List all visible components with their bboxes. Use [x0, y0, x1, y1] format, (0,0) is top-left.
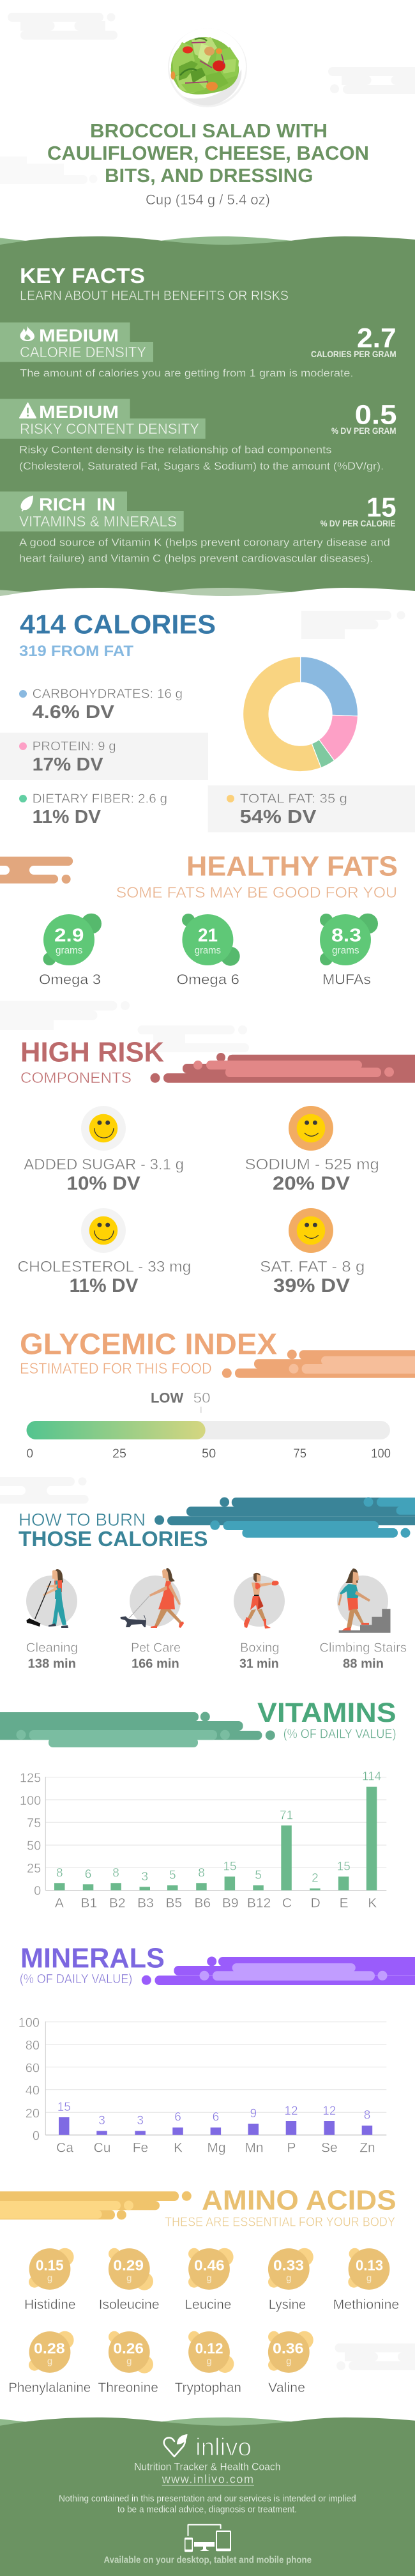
tagline: Nutrition Tracker & Health Coach: [134, 2461, 281, 2473]
y axis: [19, 2016, 40, 2143]
unit: % DV PER CALORIE: [321, 518, 395, 528]
gauge scale: 100: [371, 1447, 391, 1461]
figure: boxer: [244, 1573, 279, 1629]
stat: omega 3: [39, 914, 102, 988]
legend: protein: [19, 740, 116, 775]
y axis: 50: [27, 1839, 41, 1853]
x axis labels: B3: [137, 1896, 154, 1911]
stat: omega 3: grams: [56, 946, 83, 956]
key facts heading: KEY FACTS: [20, 264, 145, 288]
decorative cloud: [335, 2343, 415, 2370]
amino: threonine: [98, 2331, 158, 2395]
activity: cleaning: [26, 1569, 78, 1671]
amino: tryptophan: 0.12: [195, 2340, 223, 2356]
amino: tryptophan: [175, 2331, 241, 2395]
description: Risky Content density is the relationship of bad components: [19, 444, 332, 456]
activity: boxing: 31 min: [239, 1657, 279, 1671]
heading: HEALTHY FATS: [186, 851, 398, 882]
y axis: 40: [26, 2084, 40, 2098]
activity: pet care: 166 min: [132, 1657, 179, 1671]
value labels: 6: [174, 2111, 181, 2124]
decorative graphic: [0, 1712, 275, 1747]
amino: histidine: g: [47, 2273, 52, 2284]
heading line 1: HOW TO BURN: [19, 1510, 146, 1529]
description: The amount of calories you are getting from 1 gram is moderate.: [20, 368, 354, 379]
amino: valine: [268, 2331, 313, 2395]
subheading: SOME FATS MAY BE GOOD FOR YOU: [116, 884, 397, 901]
heading line 2: THOSE CALORIES: [19, 1528, 208, 1551]
value labels: 8: [112, 1866, 119, 1880]
legend: dietary fiber: [19, 792, 167, 827]
gauge scale: [27, 1447, 391, 1461]
header background clouds: [0, 13, 415, 184]
x axis labels: E: [340, 1896, 349, 1911]
amino: threonine: Threonine: [98, 2380, 158, 2395]
x axis labels: B9: [222, 1896, 239, 1911]
panel: minerals: [19, 1942, 415, 2156]
rating label: RISKY CONTENT DENSITY: [20, 420, 199, 437]
legend: protein: 17% DV: [33, 755, 103, 775]
gauge bar: [27, 1421, 390, 1439]
unit: % DV PER GRAM: [331, 425, 396, 436]
logo icon: [164, 2434, 188, 2457]
amino: methionine: 0.13: [356, 2257, 383, 2273]
legend: carbohydrates: [19, 687, 183, 723]
amino: lysine: [268, 2248, 313, 2312]
x axis labels: [55, 1896, 377, 1911]
y axis: 20: [26, 2106, 40, 2120]
description: [19, 444, 384, 472]
value labels: [57, 2101, 370, 2128]
amino: phenylalanine: [8, 2331, 91, 2395]
legend: dietary fiber: DIETARY FIBER: 2.6 g: [33, 792, 167, 806]
activity: climbing stairs: Climbing Stairs: [319, 1641, 407, 1655]
amino: leucine: [185, 2248, 234, 2312]
y axis: 80: [26, 2039, 40, 2053]
calories heading: 414 CALORIES: [20, 610, 216, 640]
panel: footer: [0, 2418, 415, 2576]
value labels: 8: [198, 1866, 205, 1880]
y axis: 75: [27, 1816, 41, 1830]
amino: threonine: 0.26: [113, 2340, 144, 2356]
amino: valine: Valine: [268, 2380, 305, 2395]
legend backgrounds: [0, 733, 415, 832]
title: CAULIFLOWER, CHEESE, BACON: [47, 142, 369, 164]
value labels: 15: [57, 2101, 71, 2114]
activity: boxing: [234, 1573, 285, 1671]
item: saturated fat: SAT. FAT - 8 g: [260, 1259, 365, 1276]
description: (Cholesterol, Saturated Fat, Sugars & Sodium) to the amount (%DV/gr).: [19, 461, 384, 472]
rating: MEDIUM: [39, 402, 119, 422]
panel: key facts: [0, 236, 415, 604]
amino: lysine: Lysine: [269, 2297, 306, 2312]
amino: leucine: Leucine: [185, 2297, 231, 2312]
x axis labels: K: [368, 1896, 377, 1911]
stat: omega 3: 2.9: [54, 925, 84, 946]
x axis labels: Mg: [207, 2141, 226, 2156]
activity: climbing stairs: 88 min: [343, 1657, 384, 1671]
icon: leaf: [20, 496, 33, 511]
value labels: 6: [213, 2111, 219, 2124]
panel: glycemic index: [20, 1327, 415, 1461]
subheading: (% OF DAILY VALUE): [20, 1972, 132, 1986]
amino: isoleucine: g: [126, 2273, 132, 2284]
decorative graphic: [142, 1956, 415, 1985]
amino: leucine: g: [206, 2273, 212, 2284]
item: added sugar: 10% DV: [66, 1173, 140, 1194]
activity: cleaning: 138 min: [28, 1657, 76, 1671]
amino: histidine: [24, 2248, 76, 2312]
icon: devices: [185, 2524, 231, 2552]
rating: MEDIUM: [39, 325, 119, 345]
panel: healthy fats: [0, 851, 398, 988]
website: www.inlivo.com: [162, 2473, 253, 2486]
panel: amino acids: [0, 2184, 415, 2395]
item: saturated fat: 39% DV: [273, 1275, 350, 1296]
amino: lysine: g: [286, 2273, 291, 2284]
value labels: 3: [137, 2114, 144, 2128]
item: sodium: 20% DV: [273, 1173, 350, 1194]
amino: threonine: g: [126, 2356, 132, 2367]
x axis labels: P: [287, 2141, 296, 2156]
panel: vitamins: [0, 1698, 396, 1911]
subheading: ESTIMATED FOR THIS FOOD: [20, 1360, 212, 1377]
title: BROCCOLI SALAD WITH: [90, 119, 328, 142]
heading: HIGH RISK: [20, 1037, 164, 1068]
rating label: VITAMINS & MINERALS: [19, 513, 177, 530]
x axis labels: Mn: [245, 2141, 264, 2156]
icon: warning: [20, 403, 36, 418]
item: cholesterol: [17, 1208, 191, 1296]
item: added sugar: ADDED SUGAR - 3.1 g: [24, 1156, 184, 1174]
activity: pet care: [121, 1568, 184, 1671]
unit: CALORIES PER GRAM: [311, 349, 396, 359]
panel: how to burn: [19, 1498, 415, 1671]
activity: climbing stairs: [319, 1568, 407, 1671]
value labels: 8: [364, 2109, 370, 2122]
legend: carbohydrates: CARBOHYDRATES: 16 g: [33, 687, 183, 702]
amino: valine: g: [286, 2356, 291, 2367]
value labels: 114: [362, 1770, 382, 1784]
bars: [59, 2117, 372, 2135]
bar chart: vitamins: [20, 1770, 386, 1911]
value labels: 3: [142, 1870, 148, 1883]
calories from fat: 319 FROM FAT: [19, 643, 133, 660]
amino: methionine: Methionine: [333, 2297, 399, 2312]
donut chart: [243, 657, 358, 772]
y axis: 60: [26, 2061, 40, 2075]
salad bowl image: [168, 28, 247, 107]
x axis labels: C: [282, 1896, 292, 1911]
fact: risky content density: [0, 399, 397, 472]
item: sodium: SODIUM - 525 mg: [245, 1156, 379, 1174]
bar chart: minerals: [19, 2016, 386, 2156]
subheading: (% OF DAILY VALUE): [283, 1728, 396, 1742]
decorative graphic: [222, 1349, 415, 1378]
stat: omega 3: Omega 3: [39, 972, 101, 988]
item: cholesterol: CHOLESTEROL - 33 mg: [17, 1259, 191, 1276]
gauge scale: 25: [112, 1447, 126, 1461]
amino: tryptophan: g: [206, 2356, 212, 2367]
decorative cloud: [0, 1477, 89, 1504]
gauge label: 50: [193, 1390, 211, 1406]
fact: calorie density: [0, 323, 396, 379]
item: sodium: [245, 1106, 379, 1194]
value labels: 3: [98, 2114, 105, 2128]
disclaimer: [59, 2494, 356, 2515]
value labels: 9: [250, 2107, 257, 2120]
availability note: Available on your desktop, tablet and mobile phone: [103, 2556, 312, 2566]
y axis: 125: [20, 1771, 41, 1785]
logo wordmark: inlivo: [195, 2434, 252, 2461]
amino: histidine: Histidine: [24, 2297, 76, 2312]
x axis labels: B5: [166, 1896, 182, 1911]
y axis: 0: [34, 1884, 41, 1898]
x axis labels: B6: [194, 1896, 211, 1911]
activity: boxing: Boxing: [240, 1641, 279, 1655]
subheading: THESE ARE ESSENTIAL FOR YOUR BODY: [165, 2215, 395, 2229]
amino: isoleucine: 0.29: [113, 2257, 144, 2273]
figure: woman walking dog: [121, 1568, 184, 1628]
panel: calories: [0, 610, 415, 832]
heading: GLYCEMIC INDEX: [20, 1327, 277, 1360]
disclaimer: to be a medical advice, diagnosis or treatment.: [117, 2505, 297, 2515]
amino: phenylalanine: Phenylalanine: [8, 2380, 91, 2395]
y axis: 25: [27, 1862, 41, 1876]
bars: [54, 1787, 377, 1890]
stat: omega 6: Omega 6: [176, 972, 239, 988]
x axis labels: D: [311, 1896, 321, 1911]
legend: total fat: TOTAL FAT: 35 g: [240, 792, 347, 806]
amino: phenylalanine: 0.28: [34, 2340, 65, 2356]
description: heart failure) and Vitamin C (helps prevent cardiovascular diseases).: [19, 553, 374, 565]
gauge scale: 50: [202, 1447, 216, 1461]
stat: mufas: MUFAs: [322, 972, 371, 988]
activity: pet care: Pet Care: [131, 1641, 181, 1655]
x axis labels: A: [55, 1896, 64, 1911]
legend: total fat: [227, 792, 347, 827]
item: cholesterol: 11% DV: [70, 1275, 139, 1296]
y axis: [20, 1771, 41, 1898]
amino: isoleucine: [99, 2248, 160, 2312]
x axis labels: [56, 2141, 375, 2156]
y axis: 100: [20, 1794, 41, 1808]
legend: protein: PROTEIN: 9 g: [33, 740, 116, 754]
stat: mufas: 8.3: [331, 925, 361, 946]
stat: omega 6: [176, 914, 240, 988]
stat: omega 6: grams: [195, 946, 221, 956]
value: 2.7: [357, 323, 396, 354]
stat: omega 6: 21: [198, 925, 218, 946]
decorative graphic: [151, 1053, 415, 1083]
description: A good source of Vitamin K (helps prevent coronary artery disease and: [19, 537, 390, 548]
legend: dietary fiber: 11% DV: [33, 807, 101, 827]
gauge tick: [200, 1407, 202, 1413]
y axis: 0: [33, 2129, 40, 2143]
heading: AMINO ACIDS: [202, 2184, 396, 2216]
x axis labels: B2: [109, 1896, 126, 1911]
figure: woman sweeping: [27, 1569, 68, 1628]
x axis labels: B1: [80, 1896, 97, 1911]
value labels: 15: [337, 1860, 351, 1874]
stat: mufas: grams: [332, 946, 359, 956]
x axis labels: B12: [247, 1896, 271, 1911]
amino: methionine: g: [366, 2273, 372, 2284]
gauge label: [151, 1390, 211, 1406]
value labels: [56, 1770, 382, 1885]
figure: woman climbing stairs: [338, 1568, 391, 1633]
amino: histidine: 0.15: [36, 2257, 64, 2273]
item: saturated fat: [260, 1208, 365, 1296]
amino: isoleucine: Isoleucine: [99, 2297, 160, 2312]
title: BITS, AND DRESSING: [105, 164, 313, 187]
description: [19, 537, 390, 565]
x axis labels: Se: [321, 2141, 338, 2156]
amino: phenylalanine: g: [47, 2356, 52, 2367]
x axis labels: Ca: [56, 2141, 73, 2156]
key facts subheading: LEARN ABOUT HEALTH BENEFITS OR RISKS: [20, 288, 289, 303]
panel: high risk: [17, 1037, 415, 1296]
title: [47, 119, 369, 187]
value labels: 15: [223, 1860, 236, 1874]
value labels: 5: [255, 1869, 262, 1882]
x axis labels: Zn: [359, 2141, 375, 2156]
value: 15: [366, 492, 396, 523]
value labels: 71: [280, 1809, 293, 1822]
amino: leucine: 0.46: [194, 2257, 225, 2273]
fact: rich in vitamins and minerals: [0, 491, 396, 565]
decorative cloud: [301, 611, 405, 639]
decorative graphic: [155, 1498, 415, 1538]
value labels: 6: [85, 1867, 91, 1881]
gauge label: LOW: [151, 1390, 184, 1406]
serving size: Cup (154 g / 5.4 oz): [146, 192, 270, 208]
y axis: 100: [19, 2016, 40, 2030]
decorative graphic: [0, 2191, 192, 2220]
amino: valine: 0.36: [273, 2340, 304, 2356]
value labels: 8: [56, 1866, 63, 1880]
value labels: 12: [322, 2104, 336, 2118]
x axis labels: K: [174, 2141, 183, 2156]
value: 0.5: [355, 399, 397, 430]
value labels: 2: [312, 1872, 319, 1885]
decorative graphic: [0, 857, 73, 884]
rating label: CALORIE DENSITY: [20, 344, 146, 360]
x axis labels: Cu: [94, 2141, 110, 2156]
legend: total fat: 54% DV: [240, 807, 316, 827]
subheading: COMPONENTS: [20, 1070, 132, 1087]
decorative clouds between sections: [0, 1001, 249, 1052]
item: added sugar: [24, 1106, 184, 1194]
value labels: 5: [169, 1869, 176, 1882]
value labels: 12: [284, 2104, 298, 2118]
legend: carbohydrates: 4.6% DV: [33, 702, 114, 723]
rating: RICH IN: [39, 494, 116, 514]
activity: cleaning: Cleaning: [26, 1641, 78, 1655]
heading: MINERALS: [20, 1942, 165, 1974]
amino: lysine: 0.33: [273, 2257, 304, 2273]
x axis labels: Fe: [133, 2141, 148, 2156]
icon: flame: [20, 326, 34, 341]
stat: mufas: [320, 914, 378, 988]
disclaimer: Nothing contained in this presentation and our services is intended or implied: [59, 2494, 356, 2504]
amino: tryptophan: Tryptophan: [175, 2380, 241, 2395]
gauge scale: 75: [293, 1447, 306, 1461]
heading: VITAMINS: [257, 1698, 396, 1728]
gauge scale: 0: [27, 1447, 33, 1461]
amino: methionine: [333, 2248, 399, 2312]
